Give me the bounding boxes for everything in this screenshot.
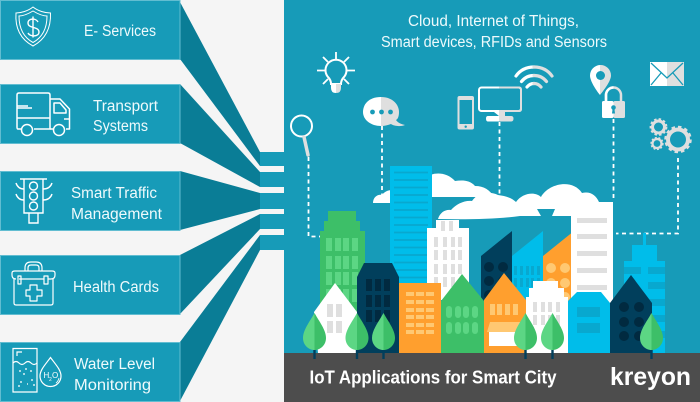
panel: Health Cards — [0, 256, 180, 314]
label: Water Level Monitoring: Water Level — [74, 356, 155, 373]
panel: Transport Systems — [0, 84, 180, 144]
panel: Water Level Monitoring: O — [52, 371, 58, 380]
building: right blue tower — [624, 233, 665, 353]
building: navy circle-window block — [481, 231, 512, 310]
panel: Water Level Monitoring: H — [44, 371, 50, 380]
building: small white stepped block — [526, 281, 568, 353]
icon: water glass and drop — [13, 348, 61, 392]
label: E- Services: E- Services — [84, 23, 156, 40]
heading: cloud and sensors: Smart devices, RFIDs and Sensors — [381, 34, 607, 51]
building: orange shop — [484, 273, 526, 353]
building: green house — [441, 274, 484, 353]
label: Smart Traffic Management: Smart Traffic — [71, 185, 157, 202]
building: tall blue tower — [390, 166, 432, 296]
clouds — [373, 173, 600, 219]
icon: envelope — [650, 62, 684, 86]
icon: location pin — [590, 65, 611, 95]
connector tabs — [260, 152, 285, 250]
icon: magnifying glass — [291, 116, 312, 155]
icon: traffic light — [16, 179, 52, 223]
label: Transport Systems: Transport — [93, 98, 159, 115]
heading: cloud and sensors — [381, 13, 607, 51]
building: orange block — [399, 283, 441, 353]
icon: truck — [17, 93, 70, 136]
building: orange angled block — [543, 231, 574, 310]
icon: smartphone — [458, 96, 474, 130]
panel: Water Level Monitoring: Monitoring — [74, 377, 151, 394]
heading: cloud and sensors: Cloud, Internet of Things, — [408, 13, 579, 30]
panel: city background — [284, 0, 700, 353]
ground bar — [284, 353, 700, 402]
panel: Water Level Monitoring: 2 — [49, 377, 52, 383]
label: Health Cards: Health Cards — [73, 279, 159, 296]
logo: kreyon: kreyon — [610, 363, 691, 391]
icon: medical case — [12, 262, 55, 305]
panel: Water Level Monitoring — [0, 342, 180, 402]
dashed connector lines — [308, 119, 678, 236]
icon: shield with dollar — [16, 7, 51, 46]
title: IoT Applications for Smart City: IoT Applications for Smart City — [310, 368, 556, 388]
building: blue angled block — [512, 231, 543, 310]
building: navy house — [610, 275, 652, 353]
panel: Transport Systems: Systems — [93, 118, 148, 135]
icon: monitor — [479, 86, 522, 122]
building: white tower — [427, 220, 469, 300]
icon: gears — [650, 119, 690, 152]
panel: E-Services — [0, 0, 180, 60]
building: tall white block — [571, 202, 613, 312]
trees — [303, 313, 663, 359]
icon: wifi — [516, 67, 552, 87]
building: white house — [314, 283, 357, 353]
connector ribbons — [180, 2, 260, 401]
icon: padlock — [602, 88, 625, 118]
icon: light bulb — [317, 52, 355, 93]
building: blue house — [568, 292, 610, 353]
icon: chat bubble — [363, 97, 405, 126]
panel: Smart Traffic Management — [0, 172, 180, 230]
building: green tower — [320, 211, 365, 353]
panel: Smart Traffic Management: Management — [71, 206, 163, 223]
building: navy tower — [357, 263, 399, 353]
